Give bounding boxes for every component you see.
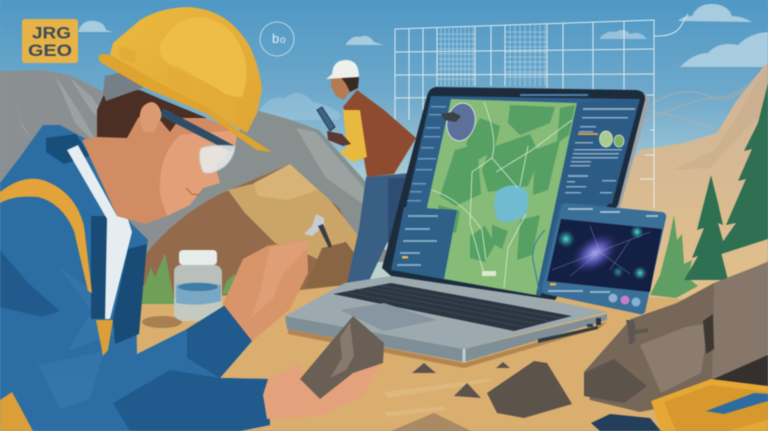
map lake (494, 185, 529, 222)
orange backpack strap (0, 179, 92, 293)
hair (340, 76, 359, 92)
logo: JRG GEO: GEO (28, 41, 72, 60)
grass tuft (137, 253, 238, 304)
hand raised holding sample (223, 239, 308, 341)
strap bottom pieces (0, 320, 113, 431)
ear (140, 102, 162, 132)
panel circular charts (600, 131, 624, 147)
circled annotation icon (260, 22, 294, 56)
jacket highlight folds (38, 266, 118, 409)
logo: JRG GEO: JRG (32, 24, 71, 42)
sidebar text lines (407, 106, 446, 202)
rock hammer on outcrop (626, 320, 648, 345)
large rock outcrop at right (584, 262, 768, 412)
smile (186, 188, 200, 195)
logo: JRG GEO (22, 19, 78, 63)
glass sample jar (174, 250, 222, 321)
tablet footer controls (548, 283, 640, 306)
mountain: tan right peak (600, 62, 768, 300)
ground (135, 260, 768, 431)
safety glasses (161, 108, 235, 173)
laptop screen (382, 87, 650, 300)
right data panel (536, 99, 640, 295)
map (427, 99, 577, 295)
laptop base (285, 276, 607, 368)
cloud link curve (654, 14, 688, 36)
geologist main figure (0, 7, 384, 431)
yellow sleeve (340, 110, 367, 162)
hat brim (98, 54, 272, 152)
clouds (78, 4, 768, 120)
hair (97, 90, 207, 138)
yellow toolbox (651, 379, 768, 431)
circled annotation icon: o (280, 35, 286, 46)
torso vest (343, 90, 416, 177)
hat suspension band (103, 70, 148, 101)
white shirt collar (67, 145, 132, 319)
white hard hat (326, 60, 359, 79)
trackpad (340, 303, 437, 331)
pine trees (650, 83, 768, 298)
jacket body (0, 125, 270, 431)
dark folder at bottom right (591, 414, 661, 431)
mountain: gray center ridge (200, 110, 366, 267)
left panel (392, 96, 640, 296)
sand mound (140, 164, 371, 299)
inner dark lining (91, 216, 147, 344)
map forest patches (438, 105, 575, 262)
legs (347, 173, 411, 285)
inset core sample (441, 112, 461, 122)
rock specimen in palm (300, 316, 384, 399)
lower left stats panel (391, 207, 457, 279)
measurement grid overlay (395, 20, 654, 208)
dense grid panels (437, 25, 547, 86)
circled annotation icon: b (272, 31, 279, 46)
top bar line (520, 94, 588, 96)
mountain: gray left range (0, 70, 410, 262)
tablet (542, 203, 666, 314)
head (331, 76, 357, 100)
foreground rocks (412, 359, 647, 418)
map inset circle (443, 101, 479, 143)
mound at bottom (391, 413, 471, 431)
handheld device (317, 107, 335, 131)
jacket shadow folds (0, 250, 270, 431)
side ports (538, 326, 598, 343)
keyboard (333, 283, 572, 331)
map label (482, 271, 496, 276)
lower cupped hand (263, 360, 378, 419)
hand (327, 131, 351, 146)
dirt patch (142, 316, 182, 328)
hood inner (46, 134, 90, 164)
neck and face (82, 95, 238, 224)
tablet header text (568, 208, 658, 217)
tiny mineral sample (304, 214, 332, 248)
hard hat (98, 7, 272, 152)
map roads (432, 102, 572, 288)
orange highlight bars (578, 133, 598, 135)
person: second surveyor in background (317, 60, 416, 285)
wispy contour lines at right (642, 65, 765, 132)
tablet star network image (547, 219, 662, 292)
